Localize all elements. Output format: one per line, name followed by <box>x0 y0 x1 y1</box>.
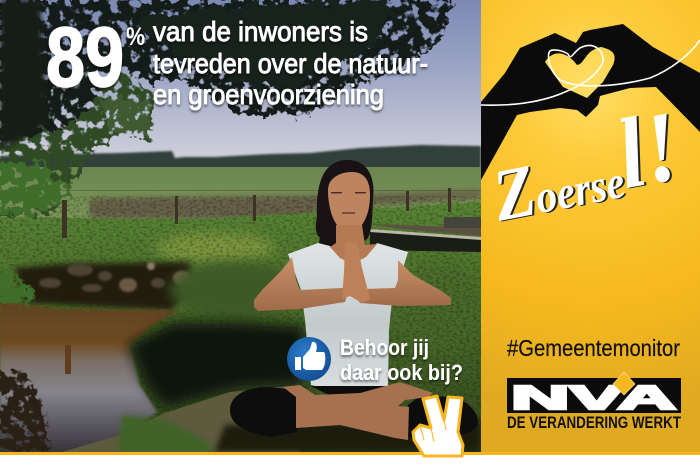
grass <box>0 202 481 452</box>
shrub above the dark bank <box>170 262 300 318</box>
hashtag: #Gemeentemonitor <box>507 335 680 361</box>
sky <box>0 0 481 165</box>
left arm <box>254 257 350 311</box>
hair <box>316 160 374 251</box>
place name text: Zoerse <box>487 149 639 238</box>
crossed legs <box>283 382 433 440</box>
heart hands silhouette <box>481 24 700 180</box>
call to action <box>340 335 463 385</box>
right yellow panel <box>481 0 700 452</box>
right grass patch <box>395 265 485 355</box>
logo black bar <box>507 378 681 413</box>
concrete slab <box>62 385 300 452</box>
face <box>328 172 370 225</box>
headline statistic <box>46 10 428 110</box>
call to action line 1: Behoor jij <box>340 335 429 360</box>
bottom yellow rule <box>0 452 700 455</box>
call to action line 2: daar ook bij? <box>340 360 463 385</box>
logo diamond <box>613 372 635 395</box>
foliage green back layer <box>0 60 155 215</box>
pole reflection <box>65 345 71 374</box>
foreground grass <box>118 415 215 452</box>
big number: 89 <box>46 10 124 104</box>
eyes and mouth <box>331 192 366 214</box>
fence posts <box>62 188 482 238</box>
rocks <box>39 262 191 292</box>
headline line 1: van de inwoners is <box>153 16 368 47</box>
tree reflection <box>0 372 50 452</box>
white heart line <box>481 40 700 105</box>
icon: thumbs up <box>287 337 331 381</box>
treeline <box>0 145 481 170</box>
foliage dense core <box>130 0 395 92</box>
place name shadow: Zoerse <box>489 149 641 238</box>
light grass patch <box>155 233 275 263</box>
logo letters: NVA <box>511 379 676 416</box>
left solid foliage <box>0 0 48 150</box>
field <box>0 167 481 222</box>
logo: N-VA <box>507 372 681 432</box>
headline line 3: en groenvoorziening <box>153 79 384 110</box>
right arm <box>352 260 451 306</box>
percent sign: % <box>126 23 145 51</box>
dark bank by the water <box>128 322 305 408</box>
waist band <box>310 386 386 394</box>
grass texture <box>0 196 481 452</box>
shirt <box>288 243 408 392</box>
icon: victory hand <box>413 396 463 456</box>
place name text: l! <box>608 90 688 210</box>
dark bank above water <box>15 262 192 310</box>
headline line 2: tevreden over de natuur- <box>153 48 428 79</box>
place name <box>480 89 691 239</box>
concrete wall <box>370 217 481 252</box>
mid foliage leaves <box>100 95 150 140</box>
place name shadow: l! <box>611 90 691 211</box>
neck and chest <box>330 225 377 264</box>
bright leaves <box>0 160 75 307</box>
ground shadow <box>215 420 481 452</box>
foliage dark layer <box>0 0 455 140</box>
woman <box>230 160 478 440</box>
praying hands <box>342 242 370 303</box>
left knee <box>230 387 298 437</box>
dirt strip <box>90 190 481 219</box>
water <box>0 301 178 452</box>
right knee <box>408 396 478 437</box>
photo: woman meditating in nature <box>0 0 485 452</box>
